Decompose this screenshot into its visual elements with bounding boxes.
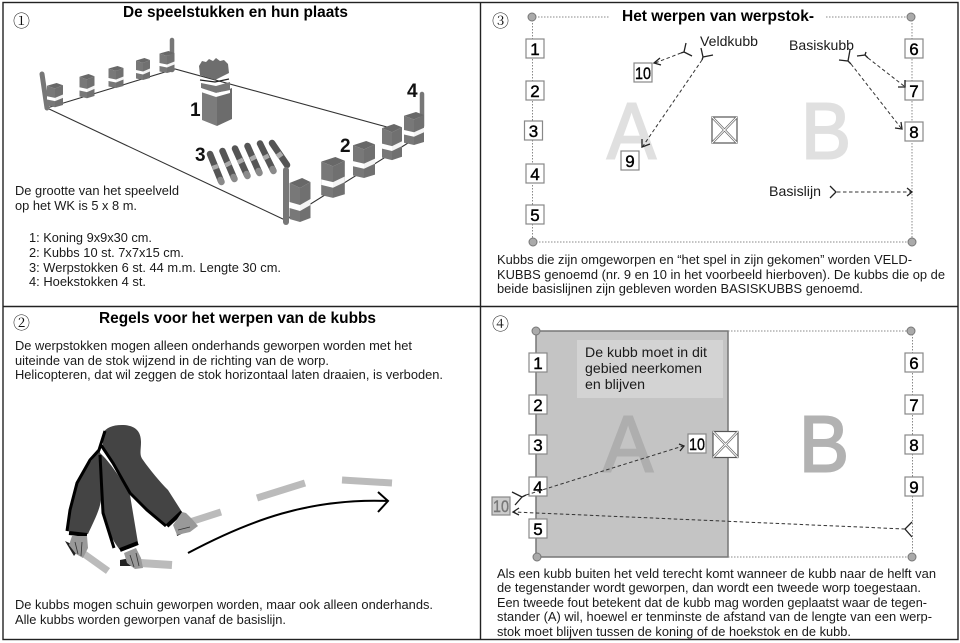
letters A and B: B [801,86,851,176]
text: outside field explanation: de tegenstander wordt geworpen, dan wordt een tweede worp toegestaan. [497,580,921,595]
corner markers [528,13,916,246]
field kubbs [621,63,652,171]
text: piece list: 4: Hoekstokken 4 st. [29,274,146,289]
kubbs left row: 1 [530,40,540,59]
kubbs right row [905,353,923,497]
panel 2: regels voor het werpen [13,309,443,627]
king marker [713,432,738,458]
kubbs left row: 5 [533,520,543,539]
kubbs right row: 9 [909,478,919,497]
panel 4: uitleg buiten het veld [492,310,936,639]
kubbs left row: 3 [529,122,538,141]
field border [728,331,912,557]
text: piece list: 1: Koning 9x9x30 cm. [29,230,152,245]
kubbs right row: 8 [909,436,919,455]
text: outside field explanation: stander (A) wil, hoewel er tenminste de afstand van de lengte van een werp- [497,609,932,624]
panel 3: het werpen van werpstokken [492,7,945,296]
kubbs left row: 1 [533,354,543,373]
text: field size: op het WK is 5 x 8 m. [15,198,137,213]
labels: Basislijn [769,183,821,199]
text: veldkubbs explanation: Kubbs die zijn omgeworpen en “het spel in zijn gekomen” worden VELD- [497,252,912,267]
arrows [512,444,912,537]
number 4: ④ [492,310,509,335]
illustration: playing field [42,40,424,222]
text: veldkubbs explanation: beide basislijnen zijn gebleven worden BASISKUBBS genoemd. [497,281,863,296]
letters A and B [603,400,849,488]
number 2: ② [13,309,30,334]
kubbs left row: 2 [530,82,540,101]
callout: De kubb moet in dit [585,344,707,360]
kubbs right row: 8 [909,123,919,142]
throwing sticks [210,143,287,182]
text: outside field explanation: Een tweede fout betekent dat de kubb mag worden geplaatst waar de tegen- [497,595,927,610]
field border [532,17,912,242]
kubbs left row: 4 [530,165,540,184]
kubbs left row: 4 [533,478,543,497]
arrows [642,43,912,198]
callout: gebied neerkomen [585,360,702,376]
arms and body [67,450,101,534]
field kubbs: 10 [635,64,651,83]
kubbs right row: 7 [909,396,919,415]
numbered labels: 1 [190,100,201,121]
sticks [80,480,392,571]
corner markers [532,327,916,561]
area A [536,331,728,557]
text: rules: uiteinde van de stok wijzend in de richting van de worp. [15,353,329,368]
callout: en blijven [585,376,645,392]
field kubbs: 9 [625,152,635,171]
text: rules: De werpstokken mogen alleen onderhands geworpen worden met het [15,338,412,353]
heading: speelstukken: De speelstukken en hun plaats [123,4,348,21]
letters A and B [607,86,851,176]
heading: werpen: Het werpen van werpstok- [622,8,814,25]
kubbs right row [905,39,923,142]
text: veldkubbs explanation: KUBBS genoemd (nr. 9 en 10 in het voorbeeld hierboven). De kubbs die op de [497,267,945,282]
kubb 10 landed: 10 [689,435,705,454]
kubbs left row: 5 [530,206,540,225]
number 1: ① [13,7,30,32]
kubbs left row: 2 [533,396,543,415]
kubbs right row: 6 [909,40,919,59]
illustration: playing field: 4 [407,81,418,102]
kubbs right row: 6 [909,354,919,373]
callout [577,340,723,398]
kubb 10 outside field: 10 [493,497,509,516]
letters A and B: A [607,86,657,176]
kubbs left row [524,39,544,225]
illustration: throwing figure [65,425,392,571]
text: outside field explanation: Als een kubb buiten het veld terecht komt wanneer de kubb naar de helft van [497,566,936,581]
kubbs left row: 3 [533,436,543,455]
text: kubb throw note: Alle kubbs worden geworpen vanaf de basislijn. [15,612,286,627]
heading: regels: Regels voor het werpen van de kubbs [99,310,376,327]
hands [65,512,198,569]
illustration: playing field: 2 [340,136,351,157]
text: outside field explanation: stok moet blijven tussen de koning of de hoekstok en de kubb. [497,624,851,639]
arrow: throw arc [188,492,388,553]
kubbs left row [529,353,547,539]
labels: Basiskubb [789,37,854,53]
text: piece list: 2: Kubbs 10 st. 7x7x15 cm. [29,245,184,260]
illustration: playing field: 3 [195,145,206,166]
kubbs right row: 7 [909,82,919,101]
king [199,58,232,126]
text: rules: Helicopteren, dat wil zeggen de stok horizontaal laten draaien, is verboden. [15,367,443,382]
number 3: ③ [492,7,509,32]
letters A and B: A [603,400,654,488]
labels [700,33,854,199]
text: field size: De grootte van het speelveld [15,183,179,198]
letters A and B: B [799,400,849,488]
labels: Veldkubb [700,33,758,49]
panel 1: de speelstukken [13,4,424,289]
text: piece list: 3: Werpstokken 6 st. 44 m.m. Lengte 30 cm. [29,260,281,275]
text: kubb throw note: De kubbs mogen schuin geworpen worden, maar ook alleen onderhands. [15,597,433,612]
king marker [712,117,737,143]
